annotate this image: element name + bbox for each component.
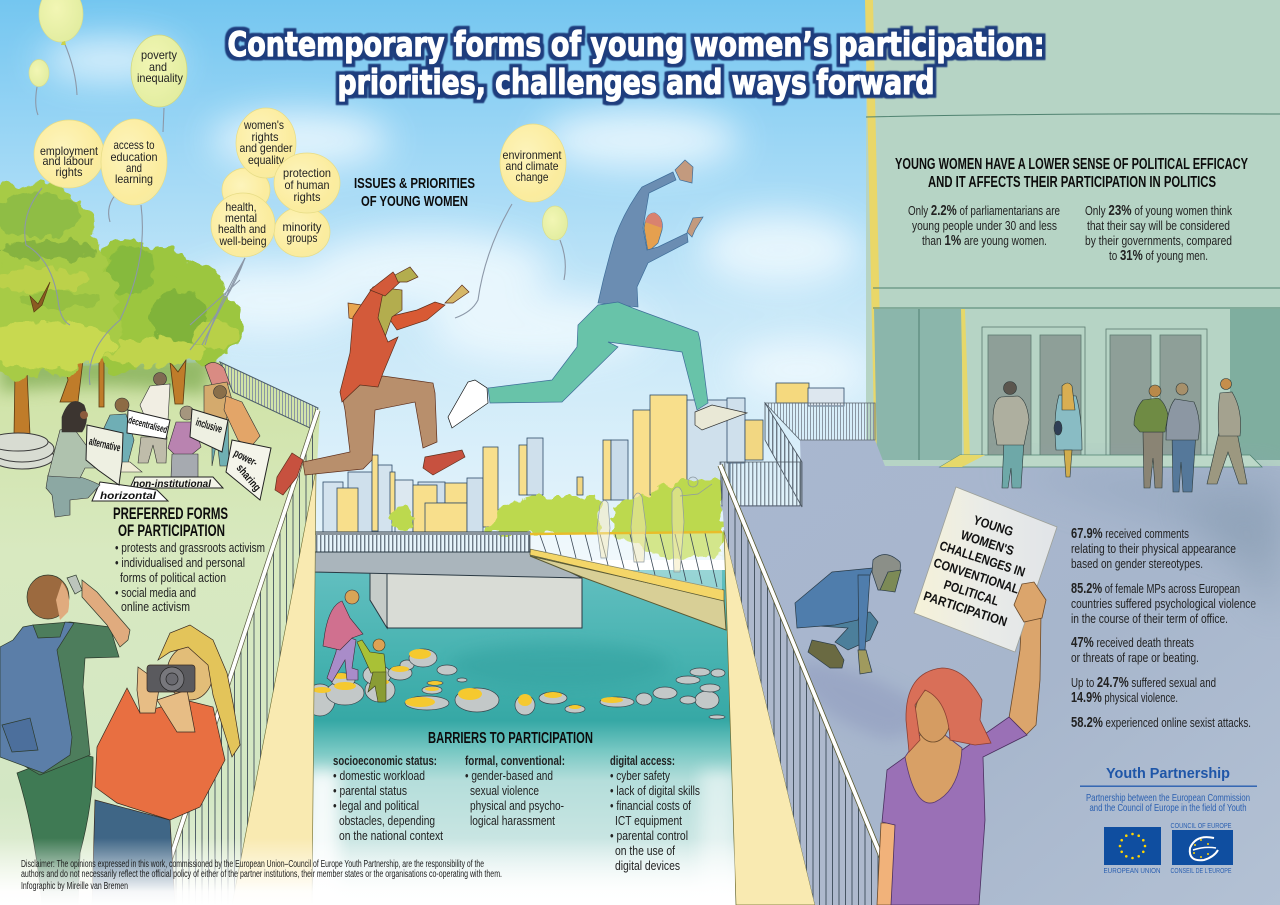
face <box>378 288 402 337</box>
arm reaching <box>388 302 445 330</box>
balloon: minority groups <box>274 207 330 257</box>
person: kneeling purple jacket <box>168 406 201 478</box>
backpack <box>0 622 74 773</box>
person: woman with pink hair <box>204 362 232 466</box>
disclaimer: authors and do not necessarily reflect the official policy of either of the partner institutions, their member states or the organisations co-operating with them. <box>21 869 502 880</box>
right ground <box>720 440 1280 905</box>
balloon: health, mental health and well-being: health, <box>226 200 256 214</box>
stat: 24.7% and 14.9%: Up to 24.7% suffered sexual and <box>1071 674 1216 691</box>
balloon: access to education and learning <box>101 119 167 205</box>
entrance step <box>940 455 1262 467</box>
heading: issues and priorities: ISSUES & PRIORITIES <box>354 175 475 192</box>
Council of Europe flag <box>1170 821 1233 875</box>
sign: non-institutional: non-institutional <box>133 479 211 490</box>
balloon: protection of human rights <box>274 153 340 213</box>
crouching man <box>795 554 901 674</box>
protest sheet: YOUNG <box>972 512 1015 539</box>
head <box>27 575 69 619</box>
balloon: decorative top <box>39 0 83 45</box>
river and lower centre background <box>305 570 736 905</box>
bushes behind bridge <box>391 480 722 560</box>
city skyline <box>323 383 844 533</box>
rocks in the river <box>305 649 725 719</box>
woman with camera <box>92 625 240 905</box>
trousers <box>303 376 437 475</box>
tree plinth <box>0 433 54 469</box>
barriers: formal, conventional: physical and psycho- <box>470 798 564 813</box>
hand holding sheet <box>1014 582 1046 622</box>
woman in purple holding sign <box>877 610 1041 905</box>
barriers: digital access: • lack of digital skills <box>610 783 700 798</box>
sky background <box>0 0 880 560</box>
raised sleeve <box>370 272 400 296</box>
person: bending in orange <box>214 386 260 448</box>
balloon: employment and labour rights: and labour <box>42 154 94 168</box>
balloon: health, mental health and well-being: mental <box>225 211 257 225</box>
stat: 24.7% and 14.9% <box>1071 674 1216 706</box>
barriers: digital access: • cyber safety <box>610 768 670 783</box>
man in khaki <box>1207 378 1247 484</box>
sign: alternative <box>86 425 123 485</box>
title <box>228 25 1044 103</box>
stat: young women's say: Only 23% of young women think <box>1085 202 1232 219</box>
heading: preferred forms of participation: PREFERRED FORMS <box>113 504 228 523</box>
stat: 47% <box>1071 634 1199 665</box>
protest sheet: PARTICIPATION <box>922 588 1009 629</box>
stat: parliamentarians: than 1% are young women. <box>922 232 1047 249</box>
barriers: digital access: • parental control <box>610 828 688 843</box>
balloon: women's rights and gender equality: women's <box>243 118 284 132</box>
balloon: poverty and inequality: poverty <box>141 48 177 62</box>
tree trunks <box>8 353 186 442</box>
heading: preferred forms of participation: OF PARTICIPATION <box>118 521 225 540</box>
barriers: formal, conventional: sexual violence <box>470 783 539 798</box>
child <box>357 639 386 702</box>
title: priorities, challenges and ways forward <box>338 63 934 103</box>
list: preferred forms <box>115 540 265 614</box>
barriers: formal, conventional: • gender-based and <box>465 768 553 783</box>
person: standing man <box>138 372 170 463</box>
man in grey coat <box>993 382 1029 488</box>
sign: decentralised: decentralised <box>127 415 168 436</box>
stat: parliamentarians: young people under 30 and less <box>912 218 1057 233</box>
person: teal top <box>103 398 142 472</box>
jumping woman in blue and teal <box>448 160 747 430</box>
face <box>167 646 213 700</box>
barriers: digital access: ICT equipment <box>615 813 682 828</box>
barriers: digital access: on the use of <box>615 843 675 858</box>
balloon: poverty and inequality: and <box>149 60 167 74</box>
sign: inclusive <box>190 409 228 452</box>
disclaimer <box>21 859 502 892</box>
hair tail <box>348 303 362 320</box>
stat: young women's say <box>1085 202 1232 264</box>
stat: 24.7% and 14.9%: 14.9% physical violence. <box>1071 689 1178 706</box>
balloon strings <box>25 42 565 385</box>
stat: parliamentarians: Only 2.2% of parliamentarians are <box>908 202 1060 219</box>
balloon: employment and labour rights <box>34 120 104 188</box>
protest sheet: CONVENTIONAL <box>932 555 1021 597</box>
hair <box>158 625 240 757</box>
list: preferred forms: online activism <box>121 599 190 614</box>
barriers: socioeconomic status: socioeconomic status: <box>333 753 437 768</box>
sign: decentralised <box>127 410 170 439</box>
balloon: women's rights and gender equality <box>236 108 296 178</box>
balloon: health, mental health and well-being <box>211 193 275 257</box>
balloon: decorative small right <box>542 206 568 240</box>
challenge statistics <box>1071 525 1256 731</box>
barriers: socioeconomic status: • parental status <box>333 783 407 798</box>
woman in blue dress <box>1054 383 1082 477</box>
barriers: formal, conventional: formal, conventional: <box>465 753 565 768</box>
balloon: environment and climate change <box>500 124 566 202</box>
list: preferred forms: • individualised and personal <box>115 555 245 570</box>
barriers: socioeconomic status: obstacles, depending <box>339 813 435 828</box>
balloon: plain behind cluster <box>222 168 270 212</box>
balloon: poverty and inequality: inequality <box>137 71 183 85</box>
stat: young women's say: by their governments, compared <box>1085 233 1232 248</box>
distant railings <box>720 403 875 507</box>
balloon: decorative small <box>29 60 49 86</box>
sign: inclusive: inclusive <box>194 416 224 436</box>
man with backpack and phone <box>0 575 130 905</box>
balloon: women's rights and gender equality: and gender <box>240 141 292 155</box>
heading: issues and priorities <box>354 175 475 210</box>
sign: alternative: alternative <box>88 436 122 455</box>
man in grey jacket <box>1166 383 1199 492</box>
disclaimer: Infographic by Mireille van Bremen <box>21 881 128 892</box>
person: crouching woman <box>46 401 113 517</box>
list: preferred forms: • protests and grassroots activism <box>115 540 265 555</box>
bottom fade on left and centre <box>0 838 735 905</box>
Youth Partnership logo block: Youth Partnership <box>1106 765 1230 782</box>
shirt <box>14 622 119 775</box>
back shoe <box>448 380 488 428</box>
EU flag <box>1104 827 1161 875</box>
barriers: socioeconomic status: • legal and political <box>333 798 419 813</box>
balloon: women's rights and gender equality: rights <box>252 130 278 144</box>
protest sheet <box>914 487 1057 652</box>
front shoe <box>423 450 465 475</box>
left fence and rail <box>168 409 320 905</box>
sign: power-sharing: power- <box>232 447 259 469</box>
protest sheet: CHALLENGES IN <box>938 538 1027 580</box>
left green ground <box>0 355 320 905</box>
balloon: access to education and learning: education <box>110 150 158 164</box>
balloon: minority groups: groups <box>286 231 318 245</box>
sign: power-sharing: sharing <box>234 462 263 494</box>
camera <box>147 665 195 692</box>
balloon: employment and labour rights: employment <box>40 144 99 158</box>
people crossing on stones <box>323 590 386 702</box>
Council of Europe flag: CONSEIL DE L'EUROPE <box>1170 866 1232 875</box>
stat: young women's say: that their say will be considered <box>1087 218 1230 233</box>
tree: right <box>88 237 243 375</box>
protest sheet: WOMEN'S <box>959 527 1016 558</box>
balloon: protection of human rights: protection <box>283 166 331 180</box>
balloon: access to education and learning: learning <box>115 172 153 186</box>
stat: 67.9% <box>1071 525 1236 571</box>
Council of Europe flag: COUNCIL OF EUROPE <box>1170 821 1232 830</box>
balloon: protection of human rights: rights <box>294 190 320 204</box>
trees <box>0 182 243 380</box>
doors <box>982 327 1207 459</box>
sign: horizontal <box>92 482 168 502</box>
jumping woman in red <box>275 267 469 495</box>
heading: preferred forms of participation <box>113 504 228 540</box>
barriers: digital access: • financial costs of <box>610 798 691 813</box>
people entering the parliament <box>993 378 1247 492</box>
balloon: environment and climate change: environment <box>502 148 562 162</box>
front shoe <box>695 405 747 430</box>
barriers: digital access: digital devices <box>615 858 680 873</box>
balloon: health, mental health and well-being: well-being <box>219 234 266 248</box>
Youth Partnership logo block <box>1080 765 1257 875</box>
barriers: socioeconomic status: on the national context <box>339 828 443 843</box>
barriers: socioeconomic status: • domestic workload <box>333 768 425 783</box>
balloon: women's rights and gender equality: equality <box>248 153 284 167</box>
barriers: formal, conventional: logical harassment <box>470 813 555 828</box>
man in green hoodie <box>1134 385 1168 488</box>
left cream ramp <box>232 470 316 905</box>
back shoe <box>275 453 303 495</box>
stat: 47%: 47% received death threats <box>1071 634 1194 651</box>
EU flag: EUROPEAN UNION <box>1104 866 1160 875</box>
disclaimer: Disclaimer: The opinions expressed in this work, commissioned by the European Union–Council of Europe Youth Partnership, are the responsibility of the <box>21 859 484 870</box>
title: Contemporary forms of young women’s participation: <box>228 25 1044 65</box>
footbridge with pier <box>314 532 726 630</box>
protest sheet: POLITICAL <box>942 577 1001 609</box>
barriers: digital access: digital access: <box>610 753 675 768</box>
building <box>865 0 1280 472</box>
right cream ramp <box>724 530 815 905</box>
fist <box>395 267 418 282</box>
sign: horizontal: horizontal <box>100 491 156 502</box>
stat: 47%: or threats of rape or beating. <box>1071 650 1199 665</box>
tree: left <box>0 182 122 380</box>
balloon: access to education and learning: and <box>126 161 142 175</box>
heading: issues and priorities: OF YOUNG WOMEN <box>361 193 468 210</box>
hands <box>137 667 160 713</box>
stat: parliamentarians <box>908 202 1060 249</box>
phone <box>67 575 82 594</box>
trousers <box>488 302 708 410</box>
balloon: environment and climate change: and climate <box>506 159 559 173</box>
heading: barriers to participation: BARRIERS TO PARTICIPATION <box>428 730 593 747</box>
stat: young women's say: to 31% of young men. <box>1109 247 1208 264</box>
balloon: environment and climate change: change <box>516 170 549 184</box>
hands <box>675 160 693 183</box>
pier <box>370 572 582 628</box>
balloon: protection of human rights: of human <box>284 178 330 192</box>
heading: political efficacy <box>895 156 1248 191</box>
jacket <box>340 280 398 402</box>
forearm and hand <box>82 580 130 647</box>
stat: 85.2% <box>1071 580 1256 626</box>
jeans <box>92 800 175 905</box>
balloon: poverty and inequality <box>131 35 187 107</box>
stat: 85.2%: in the course of their term of office. <box>1071 611 1228 626</box>
top <box>598 172 688 307</box>
right fence and rail <box>718 464 903 905</box>
balloon: access to education and learning: access to <box>114 138 155 152</box>
adult helping <box>323 590 363 682</box>
sign: power-sharing <box>226 440 271 500</box>
stat: 67.9%: relating to their physical appearance <box>1071 541 1236 556</box>
barriers: digital access <box>610 753 700 873</box>
stat: 67.9%: 67.9% received comments <box>1071 525 1189 542</box>
balloon: minority groups: minority <box>282 220 322 234</box>
tree branch <box>30 282 50 312</box>
passers-by on the bridge <box>597 477 712 572</box>
balloon: employment and labour rights: rights <box>56 165 82 179</box>
group holding signs <box>46 362 271 517</box>
list: preferred forms: • social media and <box>115 585 196 600</box>
balloon: health, mental health and well-being: health and <box>218 222 266 236</box>
barriers: socioeconomic status <box>333 753 443 843</box>
stat: 67.9%: based on gender stereotypes. <box>1071 556 1203 571</box>
list: preferred forms: forms of political action <box>120 570 226 585</box>
hair and face <box>644 213 662 252</box>
barriers: formal, conventional <box>465 753 565 828</box>
trousers <box>17 752 93 905</box>
sweater <box>95 688 225 820</box>
